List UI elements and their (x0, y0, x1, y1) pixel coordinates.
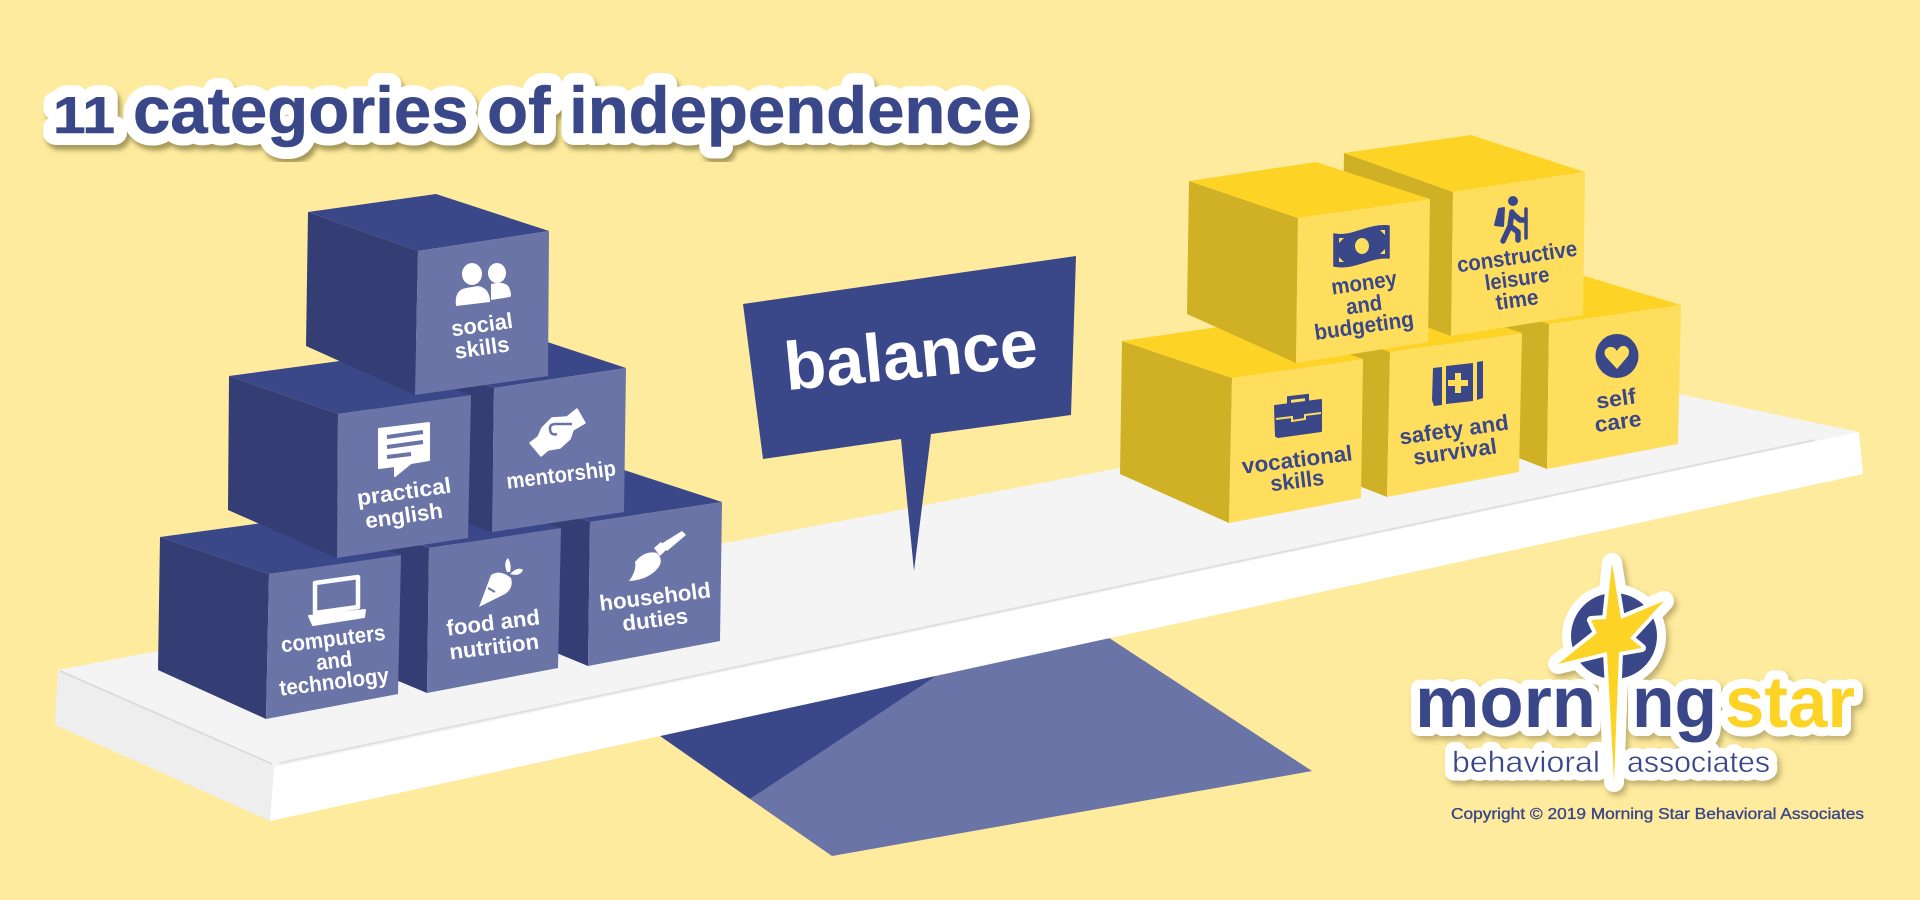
label: practical english (355, 473, 453, 533)
block: food and nutrition (300, 488, 561, 693)
label: computers and technology: and (315, 646, 353, 675)
logo wordmark: associates (1627, 746, 1770, 779)
label: mentorship: mentorship (505, 455, 617, 494)
label: vocational skills: vocational (1240, 440, 1354, 479)
icon: hiker (1495, 196, 1526, 241)
logo: morning star behavioral associates (1415, 563, 1855, 782)
block: self care (1439, 272, 1681, 469)
icon: briefcase (1275, 396, 1321, 437)
label: social skills (450, 308, 514, 364)
label: computers and technology (278, 620, 391, 701)
label: constructive leisure time: time (1494, 284, 1540, 315)
icon: two people (456, 263, 511, 306)
label: household duties: household (598, 577, 712, 616)
blue blocks stack (158, 194, 722, 719)
label: household duties: duties (621, 603, 689, 636)
logo wordmark: ng (1632, 663, 1717, 743)
block: money and budgeting (1187, 162, 1430, 363)
logo circle (1571, 593, 1657, 679)
label: social skills: social (450, 308, 514, 341)
label: practical english: english (364, 498, 444, 533)
star (1558, 563, 1664, 782)
title: 11 (53, 87, 115, 145)
logo wordmark (1415, 663, 1855, 779)
label: food and nutrition: nutrition (448, 629, 540, 664)
label: money and budgeting (1313, 266, 1415, 345)
logo wordmark: star (1725, 663, 1855, 743)
block: safety and survival (1280, 296, 1522, 497)
icon: banknote (1334, 226, 1389, 267)
label: self care: self (1594, 383, 1638, 414)
label: computers and technology: computers (279, 620, 387, 657)
block: computers and technology (158, 519, 401, 719)
label: constructive leisure time: constructive (1455, 236, 1579, 277)
label: safety and survival (1398, 410, 1510, 470)
balance sign (743, 256, 1076, 571)
block: constructive leisure time (1342, 135, 1585, 336)
label: constructive leisure time: leisure (1483, 262, 1551, 295)
icon: heart in circle (1596, 334, 1638, 378)
label: practical english: practical (355, 473, 453, 511)
label: social skills: skills (453, 331, 511, 364)
fulcrum (640, 630, 1312, 856)
icon: handshake (530, 409, 585, 456)
block: household duties (460, 450, 722, 666)
star outline (1558, 563, 1664, 782)
label: money and budgeting: and (1344, 290, 1384, 319)
label: food and nutrition: food and (445, 604, 541, 641)
label: money and budgeting: money (1330, 266, 1399, 300)
logo outline (1415, 563, 1855, 782)
label: food and nutrition (445, 604, 541, 664)
label: constructive leisure time (1455, 236, 1579, 315)
block: practical english (228, 358, 471, 558)
logo outline: morn (1415, 663, 1596, 743)
icon: laptop (309, 577, 365, 625)
block: social skills (306, 194, 549, 395)
logo wordmark: behavioral (1452, 746, 1600, 779)
title: categories of independence (133, 73, 1020, 147)
label: safety and survival: survival (1412, 433, 1498, 470)
yellow blocks stack (1120, 135, 1681, 523)
label: computers and technology: technology (278, 662, 391, 701)
icon: paint brush (629, 531, 686, 581)
icon: carrot (479, 558, 523, 607)
copyright: Copyright © 2019 Morning Star Behavioral Associates (1451, 806, 1864, 823)
label: money and budgeting: budgeting (1313, 306, 1415, 345)
logo wordmark: morn (1415, 663, 1596, 743)
title: categories of independence (133, 73, 1020, 147)
label: self care (1593, 383, 1643, 437)
label: self care: care (1593, 406, 1643, 437)
balance sign: balance (781, 305, 1041, 405)
block: vocational skills (1120, 322, 1363, 523)
logo outline: associates (1627, 746, 1770, 779)
label: vocational skills: skills (1269, 465, 1325, 496)
label: vocational skills (1240, 440, 1354, 496)
logo outline: ng (1632, 663, 1717, 743)
title: 11 (53, 87, 115, 145)
label: safety and survival: safety and (1398, 410, 1510, 450)
label: household duties (598, 577, 712, 636)
block: mentorship (372, 328, 626, 532)
logo outline: behavioral (1452, 746, 1600, 779)
balance beam plank (55, 377, 1863, 821)
icon: speech bubble (379, 423, 429, 476)
icon: first aid kit (1432, 361, 1483, 406)
logo outline: star (1725, 663, 1855, 743)
